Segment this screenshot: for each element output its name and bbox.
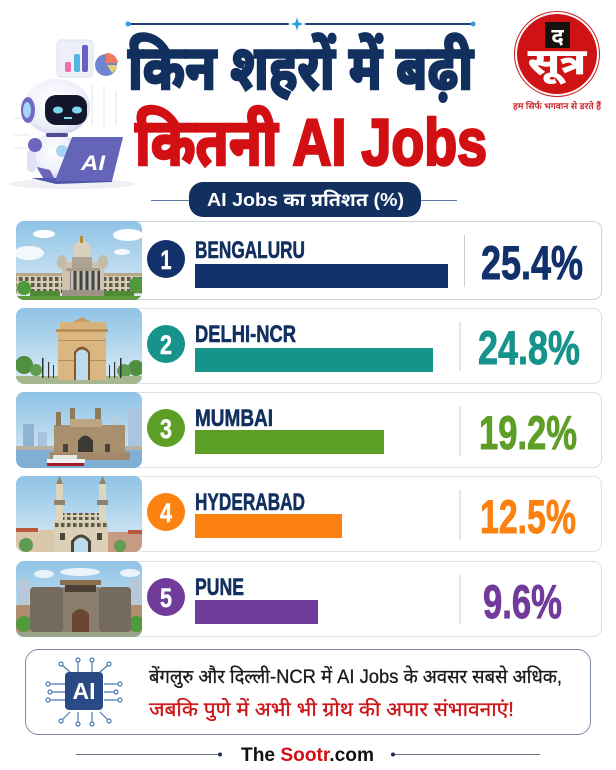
icon: AI robot with laptop and charts <box>8 40 136 189</box>
footer <box>76 745 540 766</box>
panel: Pune: 5 <box>160 583 172 613</box>
panel: Mumbai <box>16 392 602 468</box>
rank badge 4 <box>147 493 185 531</box>
callout panel <box>26 650 590 734</box>
rank badge 1 <box>147 240 185 278</box>
title line 2: कितनी AI Jobs <box>135 105 487 179</box>
bar 19.2% <box>195 430 384 454</box>
bar 25.4% <box>195 264 448 288</box>
panel: Delhi-NCR: 2 <box>160 330 172 360</box>
logo: The Sootr: सूत्र <box>528 41 588 84</box>
rank badge 3 <box>147 409 185 447</box>
value: 19.2% <box>479 406 577 459</box>
subtitle pill: AI Jobs का प्रतिशत (%) <box>207 190 404 210</box>
panel: Hyderabad <box>16 476 602 552</box>
city label: MUMBAI <box>195 405 273 432</box>
panel: Bengaluru <box>14 221 602 300</box>
panel: Bengaluru: 1 <box>160 245 172 275</box>
panel: Delhi-NCR <box>15 308 602 384</box>
image: India Gate <box>15 308 144 384</box>
logo: The Sootr: द <box>551 24 564 49</box>
footer: The Sootr.com <box>241 745 374 766</box>
city label: HYDERABAD <box>195 489 305 516</box>
subtitle pill <box>151 182 457 217</box>
title line 1: किन शहरों में बढ़ी <box>128 33 474 103</box>
icon: AI chip <box>46 658 122 726</box>
image: Charminar <box>16 476 142 552</box>
panel: Pune <box>16 561 602 637</box>
bar 9.6% <box>195 600 318 624</box>
value: 24.8% <box>478 321 580 374</box>
bar 12.5% <box>195 514 342 538</box>
panel: Mumbai: 3 <box>160 414 172 444</box>
rank badge 2 <box>147 325 185 363</box>
image: Vidhana Soudha <box>14 221 145 300</box>
city label: DELHI-NCR <box>195 321 296 348</box>
value: 9.6% <box>483 575 562 628</box>
logo: The Sootr <box>513 12 601 111</box>
image: Gateway of India <box>16 392 142 468</box>
callout line 2: जबकि पुणे में अभी भी ग्रोथ की अपार संभावनाएं! <box>149 697 514 722</box>
value: 12.5% <box>480 490 576 543</box>
icon: AI robot with laptop and charts: AI <box>80 152 106 175</box>
bar 24.8% <box>195 348 433 372</box>
city label: BENGALURU <box>195 237 305 264</box>
callout line 1: बेंगलुरु और दिल्ली-NCR में AI Jobs के अवसर सबसे अधिक, <box>149 665 562 689</box>
panel: Hyderabad: 4 <box>160 498 172 528</box>
rank badge 5 <box>147 578 185 616</box>
image: Shaniwar Wada <box>16 561 144 637</box>
top ornament line <box>126 16 476 32</box>
city label: PUNE <box>195 574 244 601</box>
logo: The Sootr: हम सिर्फ भगवान से डरते हैं <box>513 100 601 111</box>
value: 25.4% <box>481 236 583 289</box>
icon: AI chip: AI <box>72 678 96 704</box>
